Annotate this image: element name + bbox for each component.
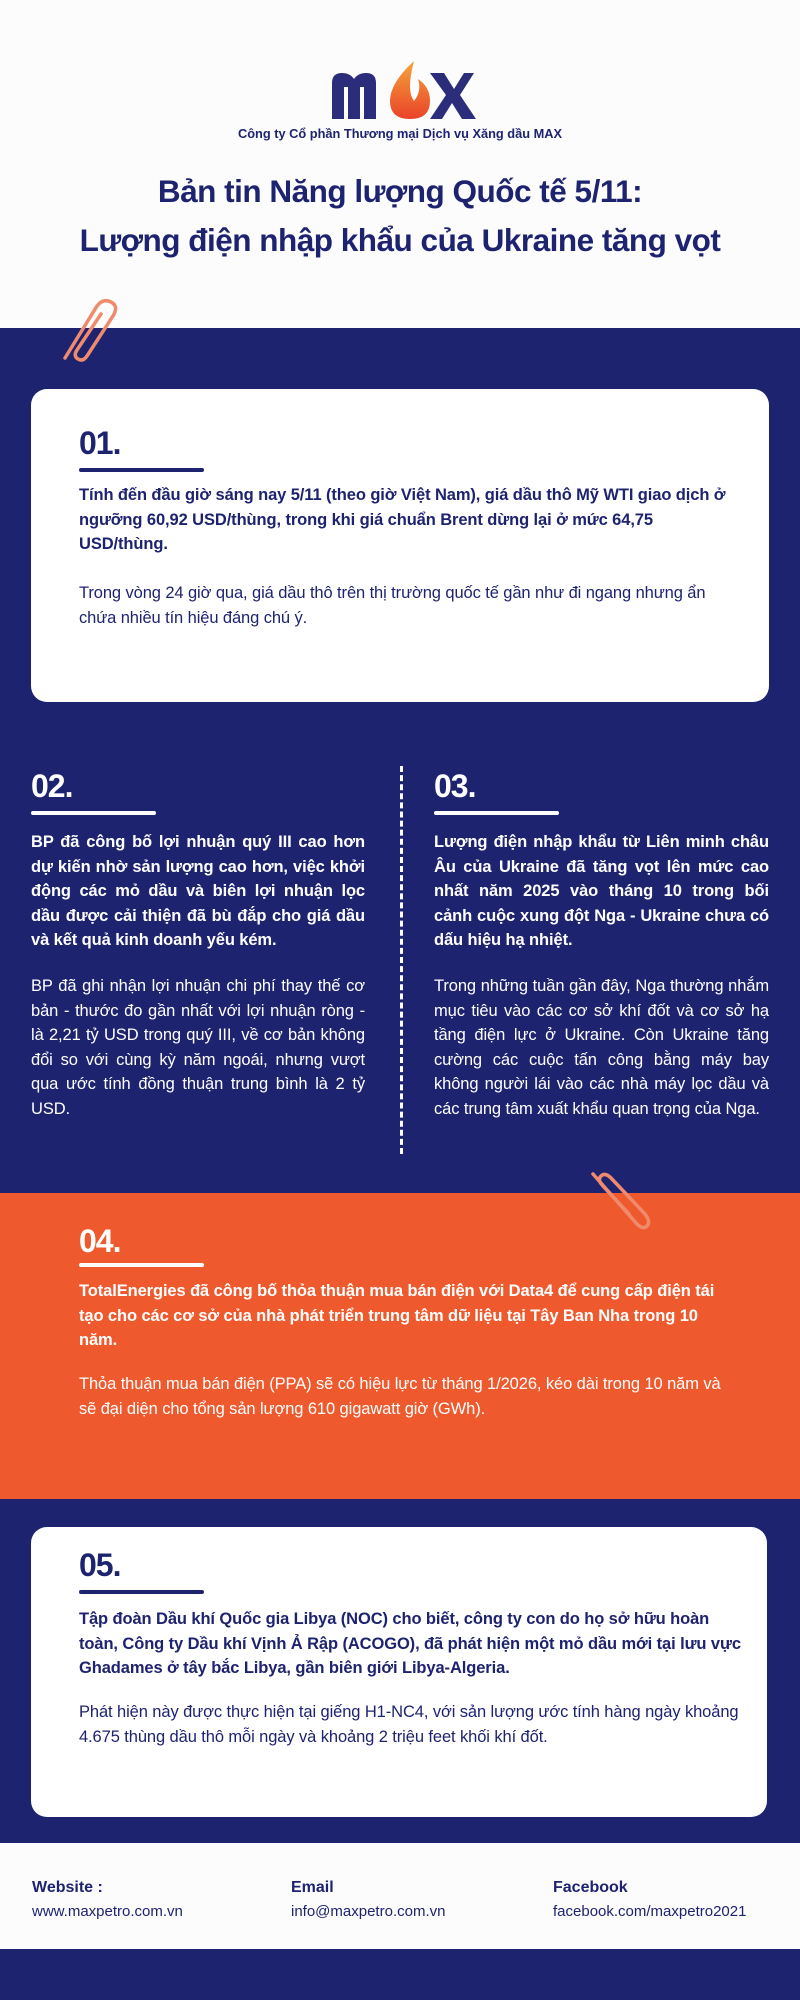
panel: 04 orange: [0, 1193, 800, 1499]
heading 01: 01.: [79, 425, 120, 461]
title: [80, 173, 720, 258]
panel: 05: [31, 1527, 767, 1817]
footer: facebook: facebook.com/maxpetro2021: [553, 1903, 746, 1920]
panel: 03: [434, 768, 770, 1118]
company name: Công ty Cổ phần Thương mại Dịch vụ Xăng dầu MAX: [238, 126, 562, 141]
heading 03: 03.: [434, 768, 475, 804]
text block 02 bold: BP đã công bố lợi nhuận quý III cao hơn dự kiến nhờ sản lượng cao hơn, việc khởi động các mỏ dầu và biên lợi nhuận lọc dầu được cải thiện đã bù đắp cho giá dầu và kết quả kinh doanh yếu kém.: [31, 833, 365, 949]
text block 03: Trong những tuần gần đây, Nga thường nhắm mục tiêu vào các cơ sở khí đốt và cơ sở hạ tầng điện lực ở Ukraine. Còn Ukraine tăng cường các cuộc tấn công bằng máy bay không người lái vào các nhà máy lọc dầu và các trung tâm xuất khẩu quan trọng của Nga.: [434, 977, 769, 1118]
navy background: [0, 328, 800, 1843]
text block 02: BP đã ghi nhận lợi nhuận chi phí thay thế cơ bản - thước đo gần nhất với lợi nhuận ròng - là 2,21 tỷ USD trong quý III, về cơ bản không đổi so với cùng kỳ năm ngoái, nhưng vượt qua ước tính đồng thuận trung bình là 2 tỷ USD.: [31, 977, 365, 1118]
title: Lượng điện nhập khẩu của Ukraine tăng vọt: [80, 222, 720, 258]
panel: 02: [31, 768, 366, 1118]
panel: 01: [31, 389, 769, 702]
footer: email: [291, 1879, 445, 1920]
heading 02: 02.: [31, 768, 72, 804]
footer: facebook: [553, 1879, 746, 1920]
footer: website: www.maxpetro.com.vn: [32, 1903, 183, 1920]
icon: paperclip top: [63, 298, 118, 362]
text block 01: Trong vòng 24 giờ qua, giá dầu thô trên thị trường quốc tế gần như đi ngang nhưng ẩn chứa nhiều tín hiệu đáng chú ý.: [79, 584, 705, 626]
footer: [0, 1843, 800, 1949]
heading 04: 04.: [79, 1223, 120, 1259]
text block 04: Thỏa thuận mua bán điện (PPA) sẽ có hiệu lực từ tháng 1/2026, kéo dài trong 10 năm và sẽ đại diện cho tổng sản lượng 610 gigawatt giờ (GWh).: [79, 1375, 721, 1418]
icon: paperclip middle: [591, 1172, 650, 1230]
text block 04 bold: TotalEnergies đã công bố thỏa thuận mua bán điện với Data4 để cung cấp điện tái tạo cho các cơ sở của nhà phát triển trung tâm dữ liệu tại Tây Ban Nha trong 10 năm.: [79, 1282, 714, 1349]
text block 05: Phát hiện này được thực hiện tại giếng H1-NC4, với sản lượng ước tính hàng ngày khoảng 4.675 thùng dầu thô mỗi ngày và khoảng 2 triệu feet khối khí đốt.: [79, 1703, 738, 1746]
text block 01 bold: Tính đến đầu giờ sáng nay 5/11 (theo giờ Việt Nam), giá dầu thô Mỹ WTI giao dịch ở ngưỡng 60,92 USD/thùng, trong khi giá chuẩn Brent dừng lại ở mức 64,75 USD/thùng.: [79, 486, 725, 553]
footer: facebook: Facebook: [553, 1879, 628, 1896]
footer: email: Email: [291, 1879, 334, 1896]
title: Bản tin Năng lượng Quốc tế 5/11:: [158, 173, 642, 209]
footer: website: [32, 1879, 183, 1920]
logo: [332, 61, 476, 119]
heading 05: 05.: [79, 1547, 120, 1583]
text block 05 bold: Tập đoàn Dầu khí Quốc gia Libya (NOC) cho biết, công ty con do họ sở hữu hoàn toàn, Công ty Dầu khí Vịnh Ả Rập (ACOGO), đã phát hiện một mỏ dầu mới tại lưu vực Ghadames ở tây bắc Libya, gần biên giới Libya-Algeria.: [79, 1610, 741, 1677]
footer: email: info@maxpetro.com.vn: [291, 1903, 445, 1920]
text block 03 bold: Lượng điện nhập khẩu từ Liên minh châu Âu của Ukraine đã tăng vọt lên mức cao nhất năm 2025 vào tháng 10 trong bối cảnh cuộc xung đột Nga - Ukraine chưa có dấu hiệu hạ nhiệt.: [434, 833, 769, 949]
footer: website: Website :: [32, 1879, 103, 1896]
